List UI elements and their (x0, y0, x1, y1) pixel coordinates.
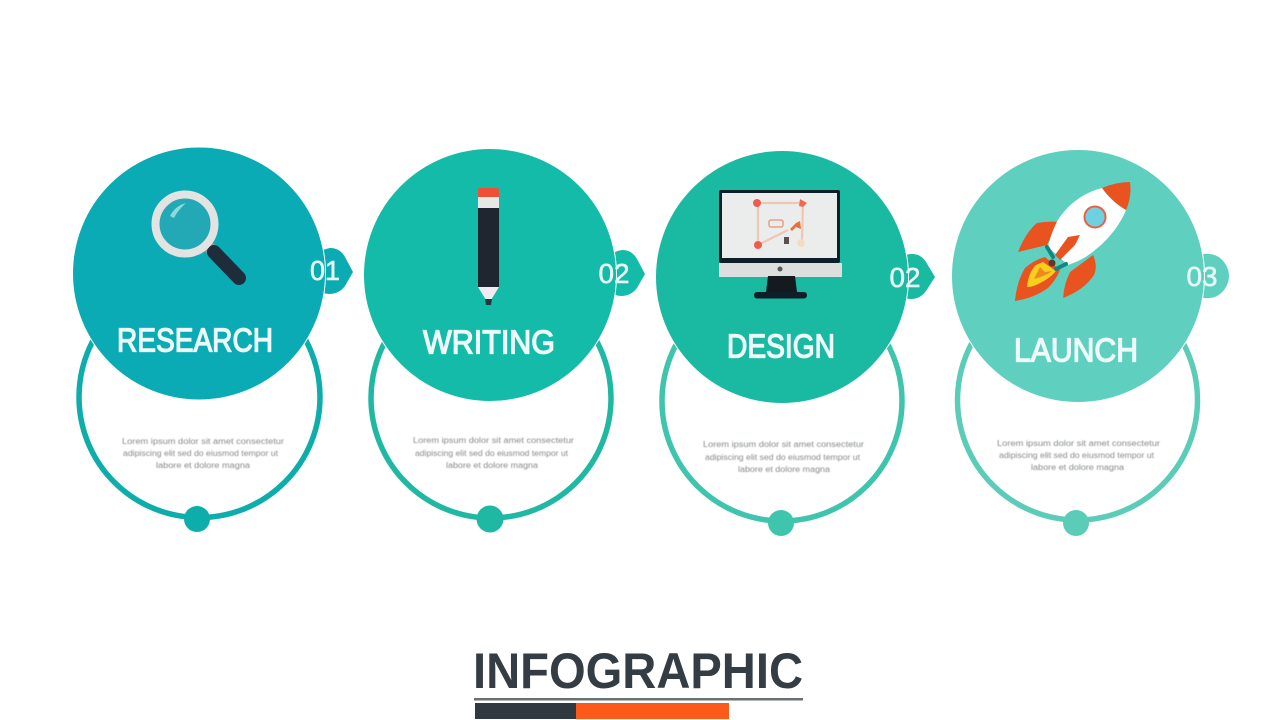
title rule (474, 698, 803, 700)
main circle: design (656, 150, 908, 404)
ring dot: design (768, 510, 794, 536)
text block: writing: adipiscing elit sed do eiusmod tempor ut (415, 449, 569, 458)
text block: launch: labore et dolore magna (1031, 463, 1125, 472)
text block: design: adipiscing elit sed do eiusmod tempor ut (705, 453, 861, 462)
number tag: research (316, 248, 353, 294)
text block: launch: Lorem ipsum dolor sit amet consectetur (997, 439, 1160, 448)
text block: design: Lorem ipsum dolor sit amet consectetur (703, 440, 864, 449)
icon: monitor (719, 190, 842, 298)
heading: research: RESEARCH (117, 322, 273, 358)
icon: rocket (1015, 182, 1130, 301)
number: 03: 03 (1186, 261, 1218, 292)
text block: launch (997, 439, 1160, 472)
ring: design (662, 281, 902, 521)
text block: launch: adipiscing elit sed do eiusmod tempor ut (999, 451, 1155, 460)
text block: writing: Lorem ipsum dolor sit amet consectetur (413, 436, 574, 445)
panel: research step (72, 147, 353, 532)
text block: writing: labore et dolore magna (446, 461, 539, 470)
text block: research: adipiscing elit sed do eiusmod tempor ut (123, 449, 279, 458)
panel: design step (656, 150, 935, 536)
heading: writing: WRITING (423, 324, 555, 360)
title text: INFOGRAPHIC (473, 643, 803, 699)
icon: magnifying glass (156, 194, 239, 278)
heading: launch: LAUNCH (1014, 332, 1138, 368)
icon: pencil (478, 188, 499, 305)
number: 01: 01 (310, 255, 340, 286)
text block: design (703, 440, 864, 474)
panel: writing step (364, 148, 645, 532)
text block: research: Lorem ipsum dolor sit amet consectetur (122, 437, 284, 446)
text block: design: labore et dolore magna (738, 465, 831, 474)
text block: writing (413, 436, 574, 470)
ring: research (79, 276, 320, 518)
number tag: design (898, 254, 935, 299)
number tag: launch (1195, 254, 1229, 298)
panel: launch step (952, 150, 1229, 536)
text block: research: labore et dolore magna (156, 461, 251, 470)
text block: research (122, 437, 284, 470)
main circle: writing (364, 148, 616, 402)
ring: launch (958, 280, 1198, 520)
ring dot: research (184, 506, 210, 532)
title bar: orange segment (576, 703, 729, 719)
main circle: research (72, 147, 326, 400)
ring dot: writing (476, 506, 504, 532)
ring dot: launch (1063, 510, 1089, 536)
number tag: writing (608, 250, 645, 296)
main circle: launch (952, 150, 1204, 402)
number: 02: 02 (598, 258, 630, 289)
number: 02: 02 (890, 262, 920, 293)
ring: writing (371, 278, 611, 518)
heading: design: DESIGN (727, 328, 835, 364)
title bar: dark segment (475, 703, 576, 719)
title (473, 643, 803, 719)
